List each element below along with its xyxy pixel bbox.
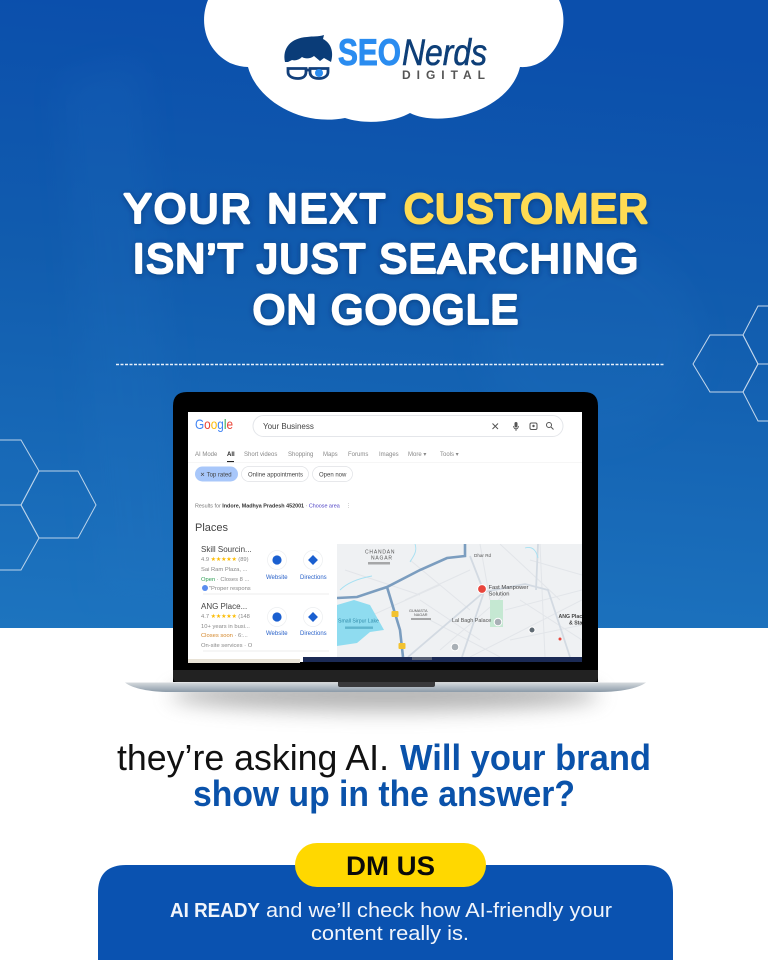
subheading line 1 dark: they’re asking AI. [117, 737, 389, 778]
panel text line 1 bold: AI READY [170, 900, 261, 922]
place listing 1: Sai Ram Plaza, ... [201, 567, 248, 573]
search tabs: Tools ▾ [440, 452, 459, 458]
map label: Lal Bagh Palace: Lal Bagh Palace [452, 618, 491, 624]
map label: Nagar: NAGAR [371, 556, 393, 562]
place 1 directions button [300, 550, 327, 581]
search tabs: Images [379, 452, 399, 458]
map label: Dhar Rd: Dhar Rd [474, 553, 492, 558]
search tabs: AI Mode [195, 452, 218, 458]
search tabs: All [227, 452, 235, 458]
map label: ANG Place: ANG Plac [558, 614, 582, 620]
filter chips: ✕ Top rated [200, 472, 232, 478]
map label: Fast Manpower: Fast Manpower [488, 585, 529, 591]
places heading: Places [195, 522, 229, 534]
blue hero background [0, 0, 768, 628]
map [337, 544, 582, 657]
laptop shadow [170, 679, 600, 711]
white cloud with logo [204, 0, 563, 122]
place 2 website button [266, 608, 288, 637]
logo: Nerds wordmark: Nerds [402, 32, 487, 73]
place listing 2: 4.7 ★★★★★ (148 [201, 613, 250, 620]
google results screen [188, 412, 582, 663]
subheading line 2: show up in the answer? [193, 773, 575, 814]
call to action panel [98, 865, 673, 960]
place listing 1: Open · Closes 8 ... [201, 577, 250, 583]
place listing 2 [201, 602, 329, 651]
filter chips [195, 466, 352, 482]
search tabs: Maps [323, 452, 338, 458]
google logo: Google [195, 416, 233, 432]
dashed divider [116, 364, 665, 366]
headline line 2: ISN’T JUST SEARCHING [133, 236, 638, 282]
map label: Gumasta: GUMASTA [409, 609, 428, 613]
laptop silver base [125, 682, 646, 692]
filter chips: Online appointments [248, 472, 303, 478]
logo: DIGITAL wordmark: DIGITAL [402, 68, 485, 82]
logo: nerd head icon [284, 35, 332, 78]
map label: Gumasta Nagar: NAGAR [414, 613, 428, 617]
place 2 directions button [300, 608, 327, 637]
DM US yellow button: DM US [346, 851, 435, 881]
taskbar strip [188, 657, 582, 663]
DM US yellow button [295, 843, 486, 887]
place listing 2: Closes soon · 6:... [201, 633, 248, 639]
laptop mockup [125, 392, 646, 692]
map label: Chandan Nagar: CHANDAN [365, 550, 395, 556]
results location line: Results for Indore, Madhya Pradesh 452001 · Choose area ⋮ [195, 504, 351, 510]
hexagons: right cluster [693, 306, 768, 421]
map label: & Sta: & Sta [569, 620, 582, 626]
panel text line 2: content really is. [311, 923, 469, 945]
laptop notch [338, 682, 435, 687]
hexagons: left cluster [0, 440, 96, 570]
search box [253, 416, 563, 436]
place 1 website button [266, 550, 288, 581]
headline line 3: ON GOOGLE [253, 286, 518, 332]
place listing 1: Skill Sourcin... [201, 545, 252, 554]
map label: lake: Small Sirpur Lake [338, 618, 379, 624]
place listing 2: 10+ years in busi... [201, 624, 250, 630]
search tabs [188, 452, 582, 462]
place listing 2: On-site services · O [201, 643, 253, 649]
headline [124, 186, 648, 332]
logo: SEO wordmark: SEO [338, 32, 401, 73]
place listing 1 [201, 545, 329, 594]
place listing 1: "Proper respons [209, 586, 251, 592]
subheading line 1 blue: Will your brand [400, 737, 651, 778]
search tabs: Shopping [288, 452, 313, 458]
place 1 directions button: Directions [300, 575, 327, 581]
place 2 directions button: Directions [300, 631, 327, 637]
laptop screen bezel [173, 392, 598, 682]
search box: Your Business [263, 422, 314, 431]
map label: Solution: Solution [488, 592, 509, 598]
filter chips: Open now [319, 472, 347, 478]
search tabs: Short videos [244, 452, 277, 458]
place 1 website button: Website [266, 575, 288, 581]
headline line 1 white: YOUR NEXT [124, 186, 385, 232]
place 2 website button: Website [266, 631, 288, 637]
search tabs: Forums [348, 452, 368, 458]
subheading [117, 737, 651, 814]
headline line 1 yellow: CUSTOMER [404, 186, 648, 232]
panel text line 1 regular: and we’ll check how AI-friendly your [266, 900, 612, 922]
place listing 1: 4.9 ★★★★★ (89) [201, 556, 249, 563]
laptop lower bar [173, 670, 598, 682]
place listing 2: ANG Place... [201, 602, 247, 611]
search tabs: More ▾ [408, 452, 426, 458]
